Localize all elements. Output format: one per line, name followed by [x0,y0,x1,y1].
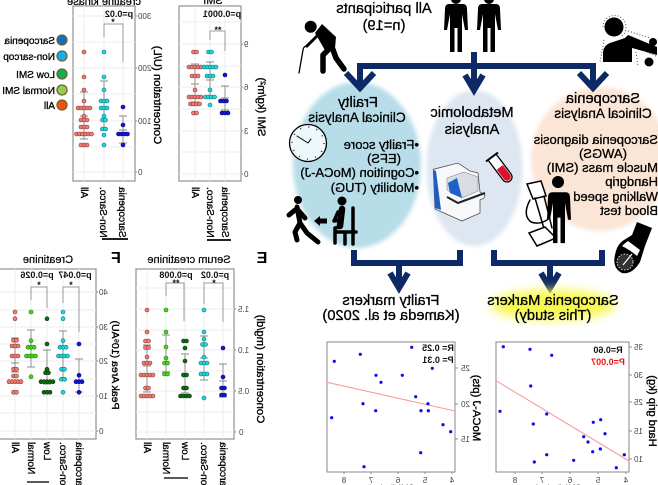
frailty measures list [300,137,419,195]
significance bracket: p=0.008: ** [172,278,180,288]
legend item: Sarcopenia: Sarcopenia [4,36,55,47]
heading: frailty markers: Frailty markers [342,293,440,309]
heading: Sarcopenia: Sarcopenia [565,91,640,107]
axis ticks: 6 [243,83,248,92]
x axis labels: Normal [160,442,171,474]
significance bracket: p=0.008: p=0.008 [159,270,193,280]
icon: two standing people [444,0,501,52]
dots: All [74,50,94,147]
y axis label: Concentration (mg/dl) [254,314,266,423]
axis ticks: 0 [98,427,103,436]
heading: Metabolomic Analysis: Analysis [445,122,499,138]
axis ticks: 20 [98,357,108,366]
axis ticks: 1.0 [237,346,249,355]
statistic: P: P=0.007 [591,357,625,367]
error bars [11,330,83,392]
x axis: 4 [623,476,628,485]
panel: MoCA-J scatter plot [327,342,482,485]
icon: person on body composition scale [526,176,571,246]
underline [207,239,231,241]
arrow: sarcopenia markers bracket [494,250,602,288]
panel: SMI chart [179,0,267,240]
sarcopenia measures list: Handgrip [605,174,658,189]
axis ticks: 40 [98,288,108,297]
x axis labels [78,187,127,238]
sarcopenia measures list [533,132,658,218]
significance bracket: p=0.026: * [37,280,41,290]
y axis: 30 [633,371,643,380]
plot frame [0,269,96,439]
y axis label: MoCA-J (pts) [470,374,482,441]
heading: Frailty: Frailty [337,95,378,111]
y axis [455,364,470,444]
x axis labels: Non-Sarco. [97,187,108,238]
icon: mass spectrometer [433,163,485,221]
panel: frailty clinical analysis [289,95,419,244]
icon: hand with grip dynamometer [614,222,652,273]
dots: Non-sarcopenia [56,310,70,394]
y axis label: Peak Area (10⁵AU) [109,321,121,409]
dots: Sarcopenia [116,105,130,147]
axis ticks: 0 [137,168,142,177]
dots: Non-sarcopenia [199,308,209,400]
x axis labels: Non-Sarco. [204,187,215,238]
sarcopenia measures list: Blood test [600,203,658,218]
axis ticks: 0.5 [237,387,249,396]
x axis: 5 [595,476,600,485]
y axis label: SMI (kg/m²) [255,77,267,136]
y axis: 15 [460,435,470,444]
plot frame [136,269,234,439]
heading: Metabolomic Analysis: Metabolomic [430,105,514,121]
axis ticks [234,305,249,437]
axis ticks: 9 [243,40,248,49]
x axis labels [141,441,228,485]
dots: All [187,50,203,115]
x axis labels [9,441,84,485]
plot frame [73,6,135,181]
significance bracket: p=0.02 [201,270,229,322]
x axis: 4 [449,476,454,485]
panel letter E: E [256,250,267,267]
data points [498,345,626,469]
significance bracket: p=0.047: * [69,280,73,290]
data points [330,346,452,468]
statistic: R: R=0.60 [593,345,623,355]
significance bracket: p=0.026: p=0.026 [20,270,54,280]
heading: sarcopenia markers: (This study) [515,308,591,324]
ellipse: frailty background [293,82,421,248]
legend item: Low SMI: Low SMI [16,70,55,81]
axis ticks: 200 [137,64,151,73]
x axis: 6 [567,476,572,485]
subheading: Clinical Analysis [308,110,406,125]
x axis [341,472,454,485]
significance bracket: p=0.047: p=0.047 [58,270,92,280]
ellipse: sarcopenia background [531,87,658,231]
panel: creatine kinase chart [67,0,163,239]
frailty measures list: (EFS) [367,151,401,166]
axis ticks: 3 [243,127,248,136]
y axis [629,343,643,464]
x axis labels: Normal [25,442,36,474]
significance bracket: p=0.047 [58,270,92,332]
significance bracket: p=0.008 [159,270,193,321]
plot frame [179,6,241,181]
significance bracket [203,9,241,51]
axis ticks: 10 [98,392,108,401]
heading: all participants: All participants [336,1,432,17]
frailty measures list: •Mobility (TUG) [331,180,419,195]
dots: Low [178,339,192,398]
legend item: Non-sarcop: Non-sarcop [3,52,55,63]
heading: all participants: (n=19) [363,18,405,34]
axis ticks: 1.5 [237,305,249,314]
plot frame [327,342,455,472]
x axis [512,472,628,485]
heading: sarcopenia markers [487,293,619,324]
y axis label: Concentration (U/L) [151,45,163,144]
axis ticks: 0 [243,170,248,179]
sarcopenia measures list: Walking speed [573,189,658,204]
heading: Creatinine: Creatinine [23,254,73,266]
error bars [80,81,127,143]
x axis: 5 [422,476,427,485]
x axis labels: Sarcopenia [219,187,230,238]
y axis: 25 [633,398,643,407]
axis ticks: 0 [238,428,243,437]
significance bracket [104,9,133,62]
axis ticks: 100 [137,117,151,126]
dots: Sarcopenia [218,73,230,115]
x axis: 6 [395,476,400,485]
significance bracket: p=0.02 [105,9,133,19]
highlight: yellow glow [491,290,615,320]
panel: sarcopenia clinical analysis [526,91,658,273]
panel: Creatinine chart [0,250,121,485]
dots: Low [39,317,55,394]
underline [27,481,49,483]
icon: sit to stand walking [289,196,356,244]
arrow: frailty markers bracket [354,250,460,288]
significance bracket: p=0.0001 [203,9,241,19]
underline [102,238,128,240]
icon: elderly person with cane [299,21,344,73]
dots: All [7,310,23,394]
axis ticks: 300 [137,12,151,21]
sarcopenia measures list: (AWGS) [579,146,627,161]
x axis labels: All [141,442,152,453]
heading: frailty markers [322,293,460,324]
axis ticks [96,288,108,436]
underline [164,477,188,479]
panel: Serum creatinine chart [136,250,267,485]
x axis labels: Low [179,441,190,460]
x axis: 7 [539,476,544,485]
x axis: 8 [341,476,346,485]
y axis: 10 [633,455,643,464]
dots: Non-sarcopenia [202,50,218,107]
dots: Normal [24,310,38,379]
heading: frailty markers: (Kameda et al. 2020) [322,308,460,324]
significance bracket: p=0.02: * [212,278,216,288]
heading: all participants [336,1,432,34]
legend item: All: All [44,101,55,112]
x axis labels: Low [41,441,52,460]
y axis label: Hand grip (kg) [646,375,658,447]
axis ticks: 30 [98,323,108,332]
arrow: split to three analyses [346,52,607,90]
dots: Non-sarcopenia [99,50,109,147]
axis ticks [135,12,151,177]
error bars [191,62,229,110]
x axis labels: All [9,442,20,453]
panel: hand grip scatter plot [496,342,658,485]
dots: Sarcopenia [74,342,84,394]
statistic: R: R= 0.25 [422,343,454,353]
trend line [496,381,629,461]
error bars [143,335,227,397]
frailty measures list: •Cognition (MoCA-J) [300,165,419,180]
x axis labels: All [189,187,200,198]
icon: person with dotted muscle outline [600,16,657,67]
x axis labels [189,187,230,238]
heading: sarcopenia markers: Sarcopenia Markers [487,293,619,309]
x axis labels: Sarcopenia [116,187,127,238]
significance bracket: p=0.02: p=0.02 [201,270,229,280]
plot frame [496,342,629,472]
heading: Serum creatinine: Serum creatinine [147,254,231,266]
legend item: Normal SMI: Normal SMI [2,86,55,97]
significance bracket: ** [214,25,222,35]
subheading: Clinical Analysis [554,106,652,121]
panel letter F: F [111,250,121,267]
x axis: 7 [368,476,373,485]
icon: clock [290,124,326,162]
statistic: P: P= 0.31 [422,355,454,365]
y axis: 20 [460,400,470,409]
sarcopenia measures list: Sarcopenia diagnosis [533,132,658,147]
icon: blood test tube [486,152,516,185]
dots: Normal [162,308,170,376]
y axis: 25 [460,364,470,373]
sarcopenia measures list: Muscle mass (SMI) [547,160,658,175]
y axis: 15 [633,427,643,436]
y axis: 35 [633,343,643,352]
trend line [327,382,455,411]
dots: All [139,308,155,398]
x axis labels: All [78,187,89,198]
significance bracket: * [111,17,115,27]
axis ticks [241,40,248,179]
ellipse: metabolomic background [426,90,522,246]
x axis: 8 [512,476,517,485]
legend [2,35,67,112]
dots: Sarcopenia [220,346,226,397]
frailty measures list: •Frailty score [344,137,419,152]
panel: metabolomic analysis [430,105,516,221]
significance bracket: p=0.026 [20,270,54,308]
heading: Metabolomic Analysis [430,105,514,138]
